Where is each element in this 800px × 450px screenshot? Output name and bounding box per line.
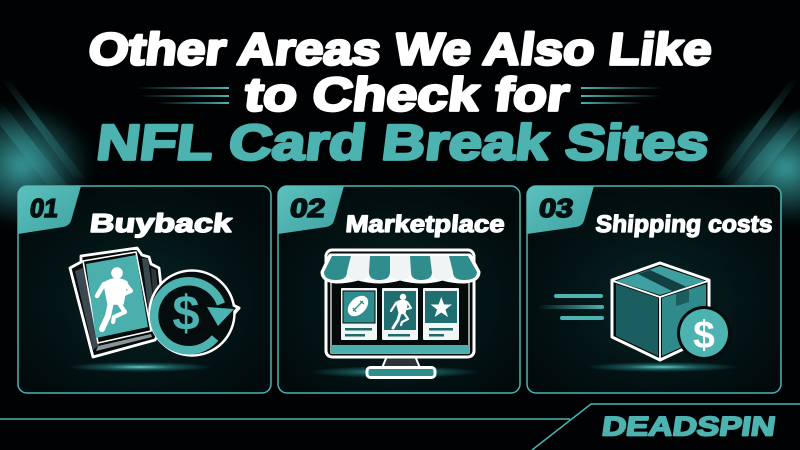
footer lines — [0, 404, 800, 450]
floor glow — [310, 366, 480, 378]
monitor stand — [382, 356, 420, 368]
panel 1 number: 01 — [28, 193, 60, 223]
panel 2 number: 02 — [288, 193, 327, 223]
panel: marketplace — [278, 186, 520, 393]
deadspin logo: DEADSPIN — [600, 411, 777, 441]
title line 1: Other Areas We Also Like — [86, 24, 715, 74]
panel 3 frame — [527, 186, 781, 393]
panel: buyback — [18, 186, 271, 393]
product card: star — [423, 288, 459, 340]
dollar sign: $ — [172, 287, 200, 341]
title line 2: to Check for — [242, 68, 572, 120]
icon: speed lines — [538, 294, 604, 320]
title — [86, 24, 715, 170]
icon: shipping box — [612, 263, 709, 360]
product card: football — [341, 288, 377, 340]
title line 3: NFL Card Break Sites — [94, 115, 713, 170]
right speed lines — [581, 87, 663, 104]
icon: trading cards — [70, 248, 165, 357]
panel 3 number: 03 — [537, 193, 575, 223]
icon: buyback dollar arrow — [150, 270, 239, 356]
floor glow — [68, 362, 212, 372]
left corner glow — [0, 78, 94, 227]
floor glow — [586, 362, 738, 372]
awning — [322, 255, 479, 282]
product card: player — [382, 288, 418, 340]
panel 1 frame — [18, 186, 271, 393]
panel 3 heading: Shipping costs — [594, 211, 774, 238]
icon: football player — [97, 267, 131, 329]
panel 2 frame — [278, 186, 520, 393]
dollar sign: $ — [693, 314, 715, 357]
panel: shipping costs — [527, 186, 781, 393]
icon: storefront monitor — [322, 250, 479, 378]
panel 2 heading: Marketplace — [344, 211, 506, 238]
panel 1 heading: Buyback — [88, 208, 235, 238]
panel 3 number tab — [527, 186, 594, 234]
right corner glow — [715, 78, 800, 226]
icon: dollar coin — [677, 306, 731, 360]
left speed lines — [137, 87, 229, 104]
panel 2 number tab — [278, 186, 344, 234]
monitor body — [326, 250, 474, 357]
panel 1 number tab — [18, 186, 81, 234]
